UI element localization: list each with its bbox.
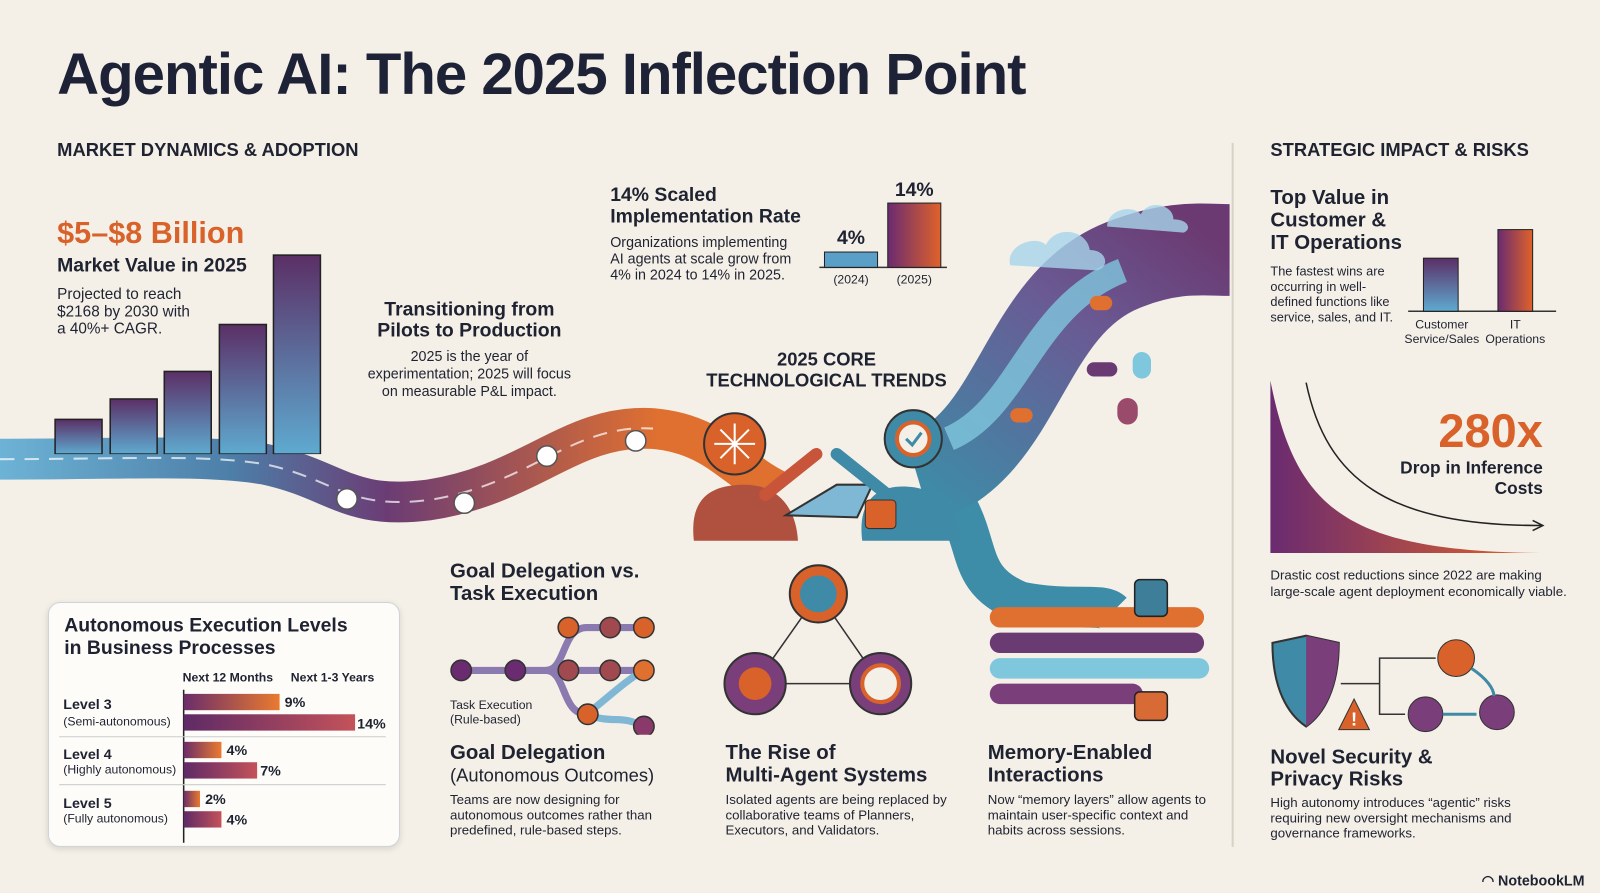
- task execution label: (Rule-based): [450, 712, 521, 727]
- panel heading: Autonomous Execution Levels: [64, 615, 348, 637]
- scaled implementation rate: [610, 185, 801, 283]
- multi-agent text: Multi-Agent Systems: [726, 764, 927, 787]
- market value text: a 40%+ CAGR.: [57, 320, 162, 338]
- bar chart: (Highly autonomous): [63, 762, 176, 776]
- core trends heading: 2025 CORE: [777, 349, 876, 369]
- clouds: [1010, 232, 1105, 270]
- core trends heading: [706, 349, 947, 391]
- panel heading: in Business Processes: [64, 638, 276, 659]
- memory text: Interactions: [988, 764, 1103, 787]
- goal delegation text: [450, 742, 654, 838]
- divider: [1232, 143, 1234, 847]
- bar chart: Next 1-3 Years: [291, 671, 374, 685]
- bar chart: Level 4: [63, 747, 112, 763]
- market value text: Projected to reach: [57, 286, 181, 303]
- bar chart: [59, 671, 386, 843]
- security text: Novel Security &: [1270, 746, 1433, 768]
- top value text: IT Operations: [1270, 232, 1402, 254]
- market bar chart: [54, 254, 322, 454]
- bar chart: Level 3: [63, 697, 112, 713]
- cost text: Drastic cost reductions since 2022 are making large-scale agent deployment economically viable.: [1270, 567, 1567, 599]
- security text: Privacy Risks: [1270, 768, 1403, 791]
- pilots to production: 2025 is the year of: [411, 348, 528, 364]
- top value text: occurring in well-: [1270, 280, 1366, 294]
- top value text: defined functions like: [1270, 295, 1390, 309]
- pilots to production: [368, 299, 571, 399]
- goal delegation text: Teams are now designing for autonomous outcomes rather than predefined, rule-based steps.: [450, 792, 652, 838]
- market value text: $5–$8 Billion: [57, 216, 244, 250]
- top value text: Top Value in: [1270, 187, 1389, 209]
- memory stripes: [1000, 617, 1199, 694]
- top value text: [1270, 187, 1402, 324]
- panel: autonomous execution levels: [48, 602, 400, 847]
- multi-agent text: The Rise of: [726, 742, 836, 764]
- scaled implementation rate: Organizations implementing: [610, 234, 787, 250]
- implementation chart: (2025): [897, 273, 932, 287]
- market value text: [57, 216, 247, 338]
- market value text: $2168 by 2030 with: [57, 303, 190, 320]
- goal delegation diagram: [450, 616, 655, 735]
- security text: [1270, 746, 1512, 841]
- top value chart: IT: [1510, 318, 1521, 332]
- top value chart: Customer: [1415, 318, 1468, 332]
- road down: [959, 510, 1112, 612]
- bar chart: (Semi-autonomous): [63, 715, 171, 729]
- top value text: Customer &: [1270, 209, 1386, 232]
- goal delegation heading: Goal Delegation vs.: [450, 560, 639, 583]
- bar chart: (Fully autonomous): [63, 811, 168, 825]
- implementation chart: 14%: [895, 179, 934, 201]
- section heading: market dynamics: MARKET DYNAMICS & ADOPTION: [57, 140, 359, 160]
- bar chart: 4%: [227, 743, 247, 759]
- implementation chart: [819, 179, 947, 287]
- security icon: !: [1351, 709, 1357, 730]
- implementation chart: (2024): [833, 273, 869, 287]
- 280x stat: Drop in Inference Costs: [1400, 458, 1543, 498]
- section heading: strategic impact: STRATEGIC IMPACT & RISKS: [1270, 140, 1529, 160]
- security text: High autonomy introduces “agentic” risks requiring new oversight mechanisms and governance frameworks.: [1270, 795, 1512, 841]
- pilots to production: experimentation; 2025 will focus: [368, 365, 571, 382]
- road left: [0, 428, 776, 502]
- scaled implementation rate: AI agents at scale grow from: [610, 250, 791, 266]
- bar chart: Next 12 Months: [183, 671, 273, 685]
- task execution label: [450, 698, 532, 727]
- 280x stat: 280x: [1438, 404, 1543, 457]
- scaled implementation rate: Implementation Rate: [610, 206, 801, 228]
- top value chart: Service/Sales: [1404, 332, 1479, 346]
- bar chart: 9%: [285, 695, 306, 711]
- inference cost curve: [1270, 380, 1544, 553]
- title: Agentic AI: The 2025 Inflection Point: [57, 42, 1026, 107]
- multi-agent text: Isolated agents are being replaced by collaborative teams of Planners, Executors, and Validators.: [726, 792, 947, 838]
- top value chart: Operations: [1485, 332, 1545, 346]
- panel heading: [64, 615, 348, 659]
- 280x stat: [1400, 404, 1543, 498]
- goal delegation text: Goal Delegation: [450, 742, 605, 764]
- scaled implementation rate: 4% in 2024 to 14% in 2025.: [610, 266, 785, 283]
- pilots to production: Pilots to Production: [377, 320, 561, 342]
- bar chart: 14%: [357, 717, 386, 733]
- memory text: Now “memory layers” allow agents to maintain user-specific context and habits across sessions.: [988, 792, 1206, 838]
- bar chart: 4%: [227, 812, 247, 828]
- illustration: two figures with laptop: [693, 409, 950, 541]
- multi-agent text: [726, 742, 947, 838]
- multi-agent icon: [723, 564, 912, 716]
- pilots to production: on measurable P&L impact.: [382, 383, 557, 399]
- goal delegation text: (Autonomous Outcomes): [450, 765, 654, 786]
- memory text: Memory-Enabled: [988, 742, 1152, 764]
- top value text: The fastest wins are: [1270, 264, 1385, 279]
- task execution label: Task Execution: [450, 698, 532, 712]
- core trends heading: TECHNOLOGICAL TRENDS: [706, 370, 947, 391]
- top value chart: [1404, 229, 1556, 346]
- bar chart: 7%: [260, 764, 281, 780]
- memory text: [988, 742, 1206, 838]
- logo: ◠ NotebookLM: [1482, 872, 1585, 889]
- bar chart: 2%: [205, 792, 226, 808]
- pilots to production: Transitioning from: [384, 299, 554, 320]
- market value text: Market Value in 2025: [57, 255, 247, 277]
- scaled implementation rate: 14% Scaled: [610, 185, 717, 206]
- goal delegation heading: Task Execution: [450, 583, 598, 605]
- implementation chart: 4%: [837, 227, 865, 249]
- top value text: service, sales, and IT.: [1270, 310, 1393, 324]
- road right big sweep: [918, 249, 1230, 480]
- bar chart: Level 5: [63, 796, 112, 812]
- security icon: [1271, 634, 1515, 732]
- goal delegation heading: [450, 560, 639, 605]
